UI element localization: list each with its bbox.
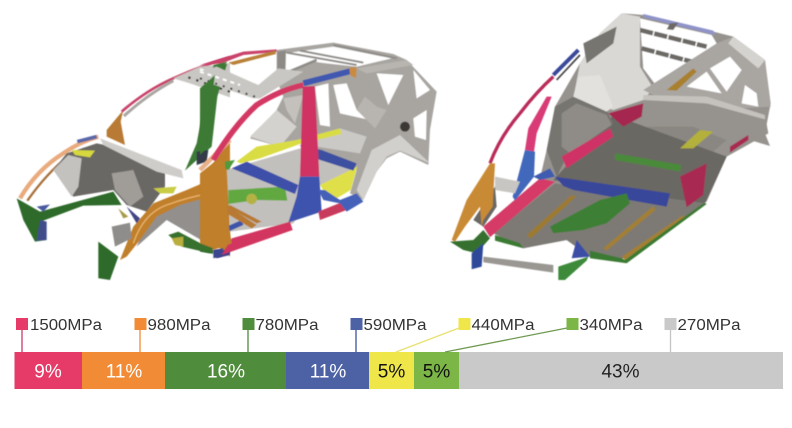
- segment 270MPa 43%: [459, 352, 783, 389]
- legend: 780MPa: 780MPa: [256, 317, 319, 334]
- segment 440MPa 5%: 5%: [378, 362, 405, 382]
- segment 980MPa 11%: [82, 352, 165, 389]
- legend: 780MPa: [242, 317, 319, 352]
- left car body structure, front section: [17, 57, 230, 280]
- legend: 590MPa: 590MPa: [364, 317, 427, 334]
- legend: 1500MPa: [16, 317, 102, 352]
- segment 590MPa 11%: [286, 352, 369, 389]
- legend: 590MPa: [350, 317, 427, 352]
- legend: 980MPa: 980MPa: [148, 317, 211, 334]
- segment 1500MPa 9%: 9%: [34, 362, 62, 382]
- segment 780MPa 16%: [165, 352, 286, 389]
- left car body structure, rear section: [200, 43, 437, 258]
- segment 340MPa 5%: 5%: [423, 362, 450, 382]
- segment 1500MPa 9%: [14, 352, 82, 389]
- legend: 340MPa: 340MPa: [580, 317, 643, 334]
- legend: 440MPa: [396, 317, 535, 352]
- segment 440MPa 5%: [369, 352, 414, 389]
- segment 590MPa 11%: 11%: [310, 362, 346, 382]
- segment 340MPa 5%: [414, 352, 459, 389]
- segment 980MPa 11%: 11%: [106, 362, 142, 382]
- legend: 1500MPa: 1500MPa: [30, 317, 102, 334]
- stacked bar: steel share by strength: [14, 352, 783, 389]
- segment 270MPa 43%: 43%: [601, 362, 640, 382]
- segment 780MPa 16%: 16%: [207, 362, 245, 382]
- legend: 980MPa: [134, 317, 211, 352]
- legend: 440MPa: 440MPa: [472, 317, 535, 334]
- legend: 270MPa: 270MPa: [678, 317, 741, 334]
- legend: 340MPa: [445, 317, 643, 352]
- right car underside view: [450, 13, 771, 280]
- legend: 270MPa: [664, 317, 741, 352]
